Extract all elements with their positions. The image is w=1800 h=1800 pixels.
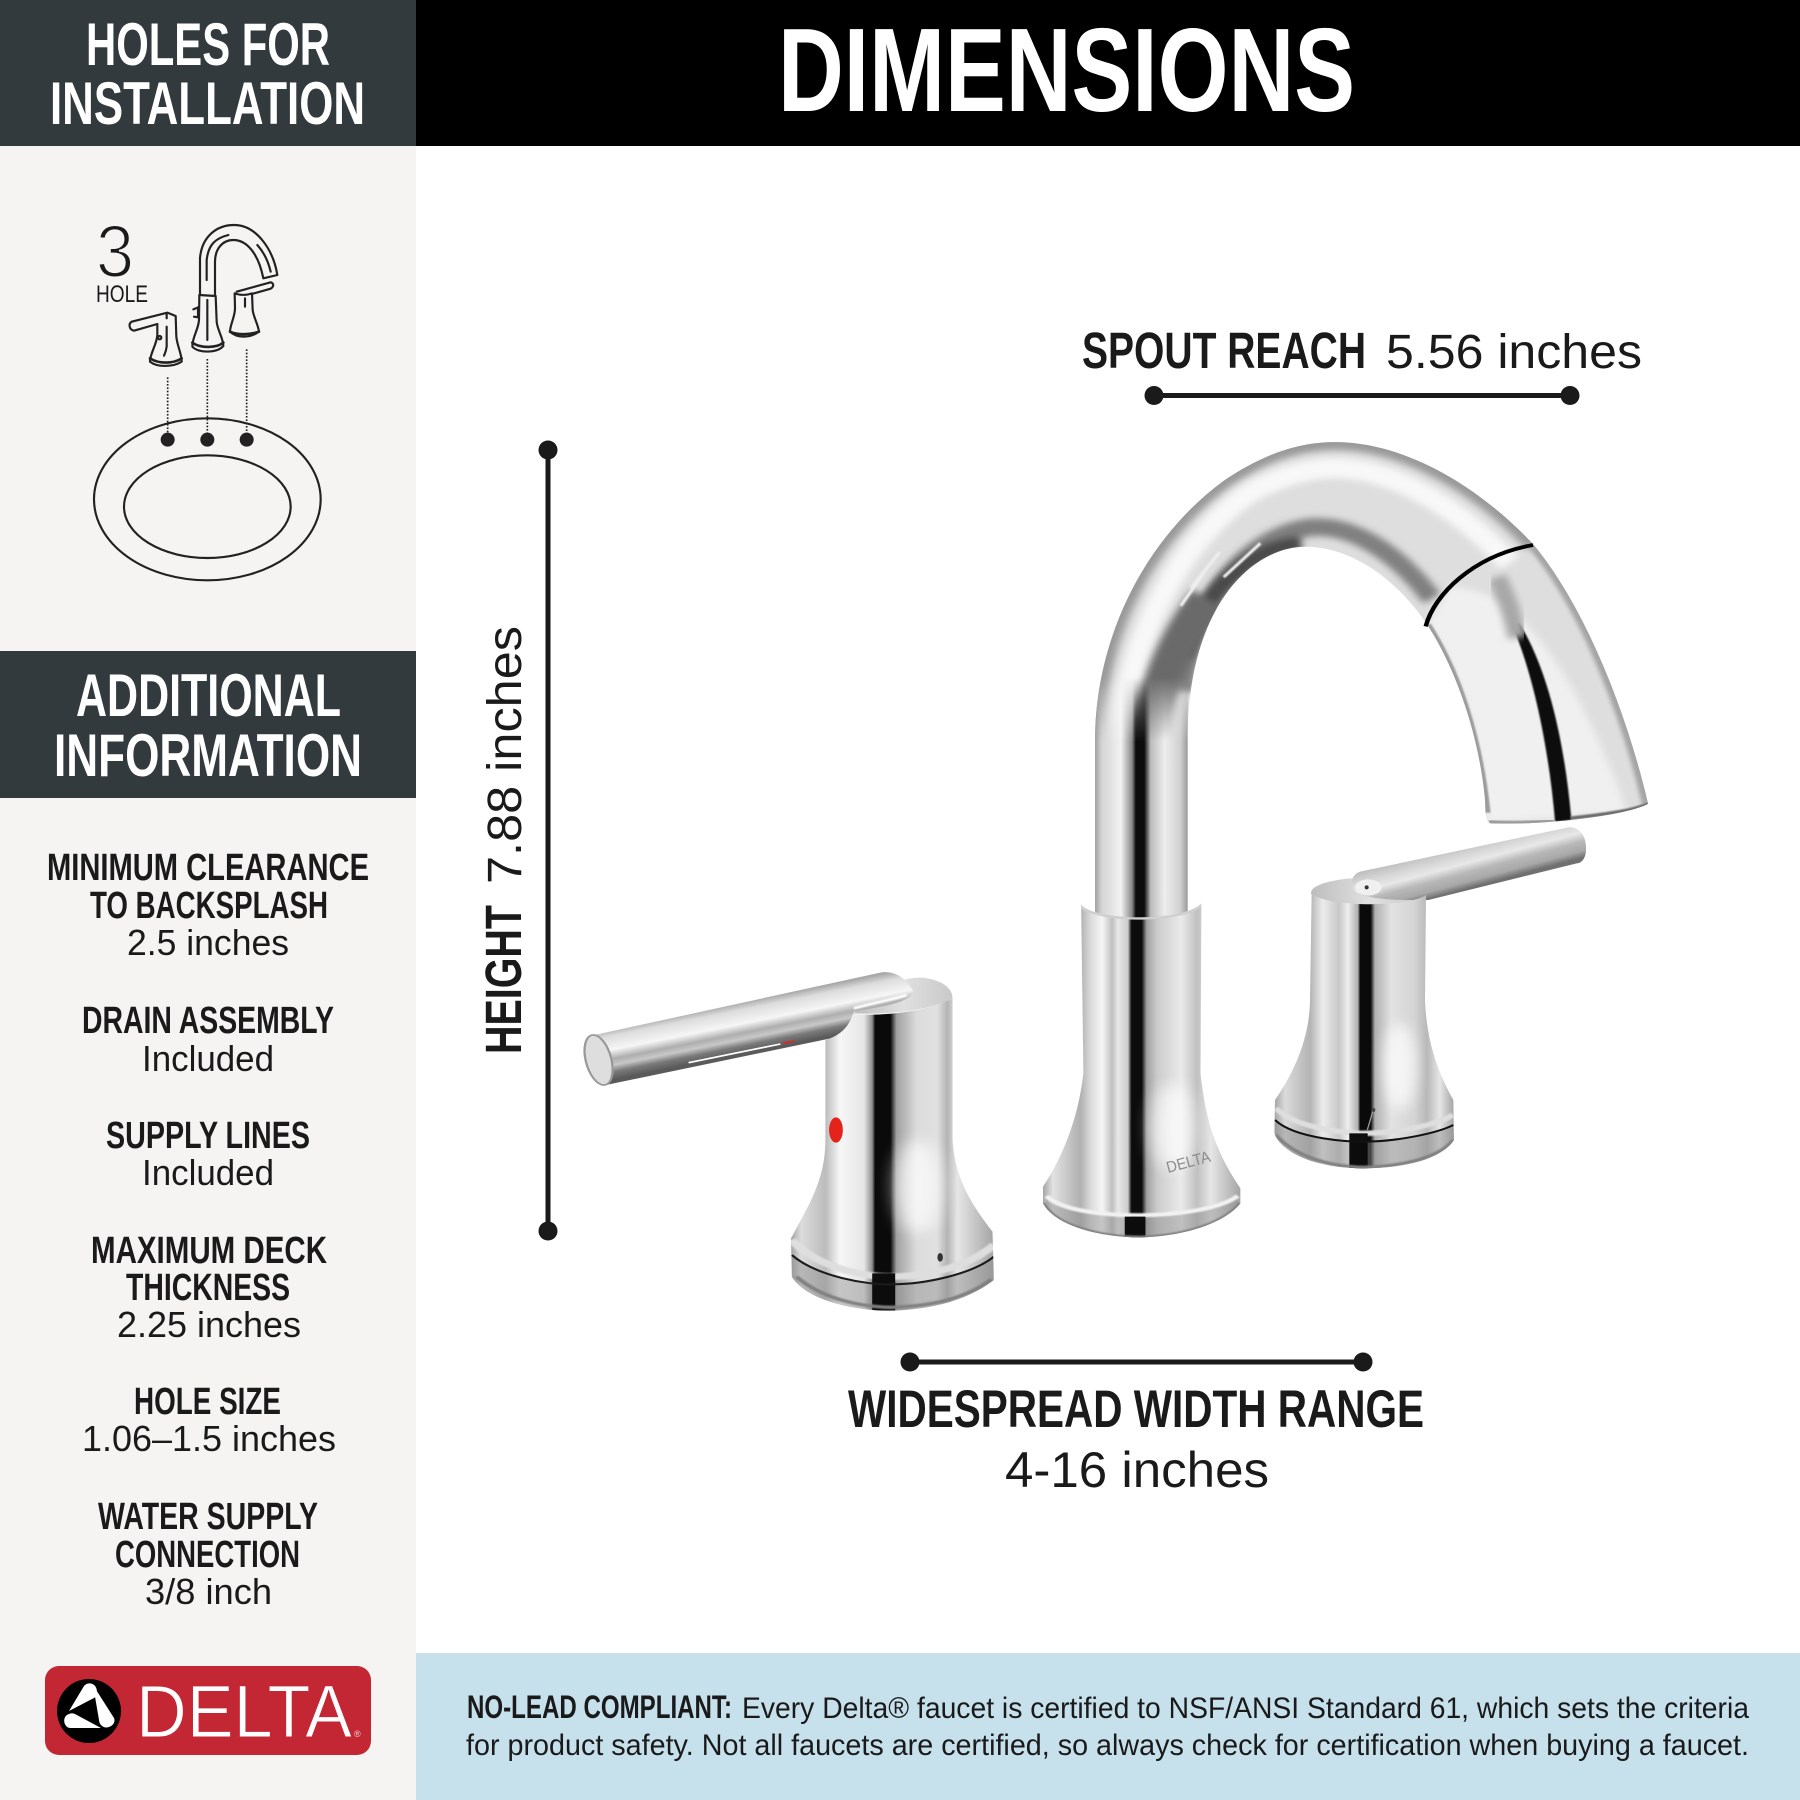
spec: hole size: 1.06–1.5 inches	[82, 1418, 336, 1459]
spec: drain assembly: Included	[142, 1038, 274, 1079]
spec: maximum deck thickness: MAXIMUM DECK	[91, 1230, 327, 1272]
dimension: height: 7.88 inches	[479, 626, 532, 884]
left sidebar panel	[0, 146, 416, 1800]
spec: water supply connection	[98, 1496, 318, 1612]
spec: hole size: HOLE SIZE	[134, 1381, 281, 1423]
faucet left handle	[580, 972, 994, 1313]
spec: water supply connection: WATER SUPPLY	[98, 1496, 318, 1538]
dimension: spout reach	[1082, 322, 1642, 405]
header: holes for installation: HOLES FOR	[86, 11, 330, 78]
header: additional information	[0, 651, 416, 798]
callout: no-lead compliant: for product safety. Not all faucets are certified, so always check for certification when buying a faucet.	[466, 1729, 1749, 1762]
title bar: dimensions: DIMENSIONS	[778, 4, 1355, 137]
dimension: widespread width range: WIDESPREAD WIDTH RANGE	[848, 1380, 1424, 1439]
header: additional information: ADDITIONAL	[76, 662, 341, 729]
faucet right handle	[1274, 827, 1586, 1170]
logo: Delta	[45, 1666, 371, 1755]
title bar: dimensions	[416, 0, 1800, 146]
spec: supply lines: Included	[142, 1152, 274, 1193]
callout: no-lead compliant: NO-LEAD COMPLIANT:	[467, 1689, 732, 1725]
icon: 3 hole faucet and sink diagram	[94, 210, 321, 580]
spec: maximum deck thickness	[91, 1230, 327, 1345]
spec: supply lines	[106, 1115, 310, 1193]
spec: water supply connection: 3/8 inch	[145, 1571, 272, 1612]
dimension: height	[475, 440, 558, 1240]
spec: maximum deck thickness: THICKNESS	[126, 1267, 290, 1309]
header: additional information: INFORMATION	[54, 722, 362, 789]
spec: supply lines: SUPPLY LINES	[106, 1115, 310, 1157]
icon: 3 hole faucet and sink diagram: HOLE	[96, 281, 148, 308]
spec: drain assembly	[82, 1000, 334, 1079]
dimension: spout reach: 5.56 inches	[1386, 326, 1642, 379]
header: holes for installation: INSTALLATION	[50, 70, 365, 137]
logo: Delta: DELTA	[136, 1670, 353, 1753]
faucet: chrome product illustration	[580, 431, 1660, 1313]
spec: minimum clearance: MINIMUM CLEARANCE	[47, 847, 369, 889]
dimension: widespread width range: 4-16 inches	[1005, 1442, 1269, 1498]
faucet spout	[1081, 431, 1660, 931]
callout: no-lead compliant	[416, 1653, 1800, 1800]
faucet brand mark: DELTA	[1165, 1149, 1213, 1177]
spec: minimum clearance	[47, 847, 369, 963]
callout: no-lead compliant: Every Delta® faucet is certified to NSF/ANSI Standard 61, which sets the criteria	[742, 1692, 1749, 1725]
dimension: spout reach: SPOUT REACH	[1082, 322, 1366, 379]
spec: minimum clearance: 2.5 inches	[127, 922, 289, 963]
spec: minimum clearance: TO BACKSPLASH	[90, 885, 328, 927]
faucet base	[1043, 900, 1240, 1240]
dimension: widespread width range	[848, 1352, 1424, 1498]
spec: water supply connection: CONNECTION	[115, 1534, 300, 1576]
spec: drain assembly: DRAIN ASSEMBLY	[82, 1000, 334, 1042]
hot indicator dot	[829, 1117, 843, 1143]
icon: 3 hole faucet and sink diagram: 3	[96, 210, 134, 293]
header: holes for installation	[0, 0, 416, 146]
dimension: height: HEIGHT	[475, 905, 532, 1054]
logo: Delta: ®	[354, 1729, 361, 1739]
spec: maximum deck thickness: 2.25 inches	[117, 1304, 301, 1345]
spec: hole size	[82, 1381, 336, 1459]
